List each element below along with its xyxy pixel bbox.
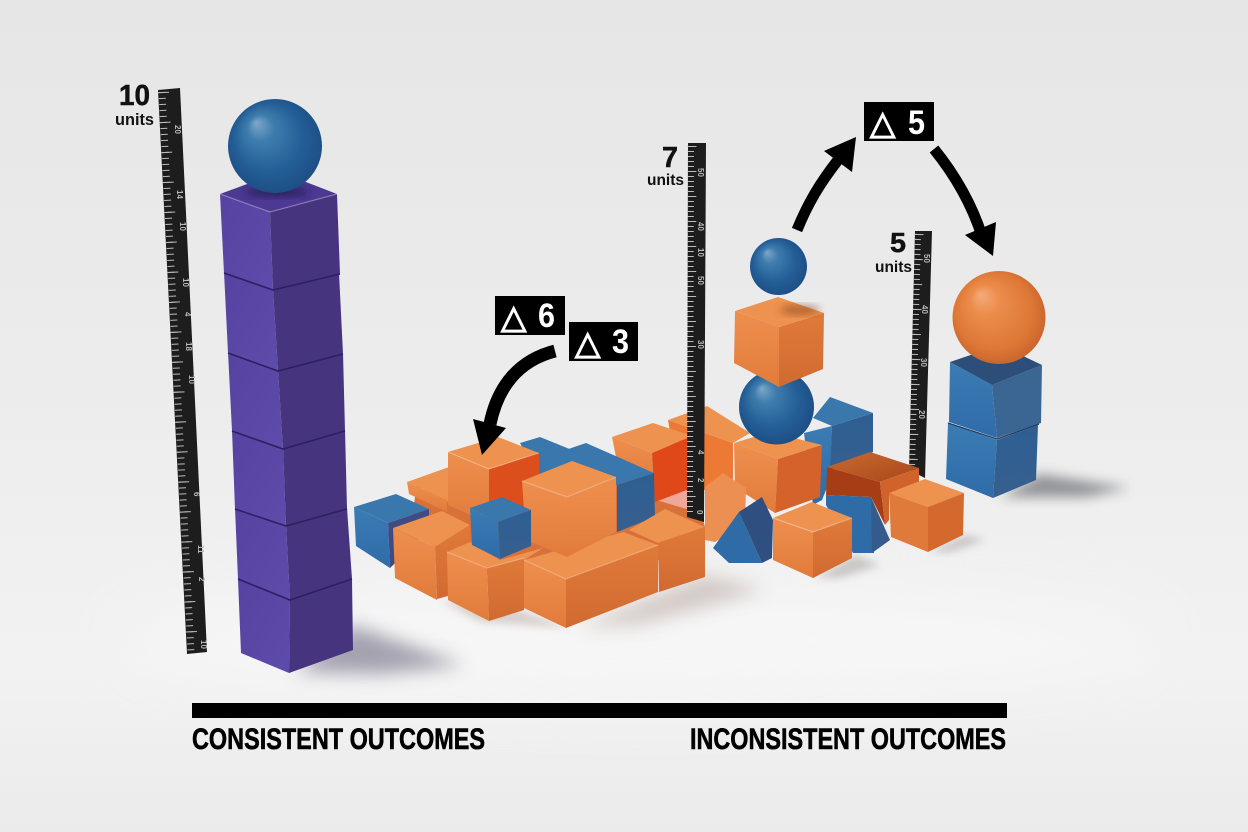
ruler: 7 units: 2 [696,478,705,483]
tag: delta 6: 6 [538,297,555,335]
ruler: 10 units: 6 [192,492,201,497]
ruler: 10 units: 10 [187,375,196,384]
ruler: 10 units: 10 [178,222,187,231]
ruler: 10 units: 11 [196,545,205,554]
ruler: 7 units: 50 [696,276,705,285]
stacked blue sphere, orange cube and small blue sphere [734,238,824,444]
arrow: down from delta 5 [934,149,996,256]
ruler: 7 units: 30 [696,340,705,349]
right stack: two blue cubes and orange sphere [946,271,1046,498]
ruler: 10 units [158,88,208,654]
ruler: 10 units: 10 [199,640,208,649]
label: 10 units [115,80,154,129]
ruler: 10 units: 20 [173,125,182,134]
ruler: 10 units: 4 [183,312,192,317]
tag: delta 5: 5 [908,104,925,142]
label: 5 units: 5 [890,227,906,258]
ruler: 10 units: 14 [175,190,184,199]
pile: front blocks [393,461,705,628]
label: 7 units [647,142,684,189]
middle cluster blocks [705,397,964,578]
tag: delta 5 [864,102,934,142]
tag: delta 3: △ [575,323,601,362]
ruler: 5 units [909,231,932,478]
ruler: 7 units: 10 [696,248,705,257]
label: 7 units: units [647,172,684,189]
ruler: 7 units [687,143,706,522]
pile: back blocks [354,406,750,585]
ruler: 10 units: 2 [197,577,206,582]
ruler: 5 units: 50 [922,254,931,263]
ruler: 7 units: 0 [695,510,704,515]
purple stack of six cubes [220,172,353,673]
blue sphere on purple stack [228,99,322,193]
axis bar [192,703,1007,718]
tag: delta 6 [495,296,565,336]
tag: delta 3: 3 [612,323,629,361]
axis label: inconsistent: INCONSISTENT OUTCOMES [690,723,1006,756]
ruler: 7 units: 40 [696,222,705,231]
arrow: into pile [473,351,555,455]
arrow: up to delta 5 [797,137,856,230]
ruler: 5 units: 30 [919,358,928,367]
axis label: consistent: CONSISTENT OUTCOMES [192,723,485,756]
ruler: 7 units: 4 [696,450,705,455]
floor shadows [120,474,1160,700]
ruler: 10 units: 10 [181,278,190,287]
ruler: 7 units: 50 [696,168,705,177]
tag: delta 6: △ [501,297,527,336]
label: 5 units: units [875,259,912,276]
label: 10 units: 10 [119,80,150,112]
tag: delta 5: △ [870,103,896,142]
label: 10 units: units [115,110,154,129]
ruler: 10 units: 18 [184,342,193,351]
tag: delta 3 [569,322,638,362]
label: 5 units [875,227,912,276]
ruler: 5 units: 20 [917,410,926,419]
label: 7 units: 7 [662,142,678,174]
ruler: 5 units: 40 [920,305,929,314]
